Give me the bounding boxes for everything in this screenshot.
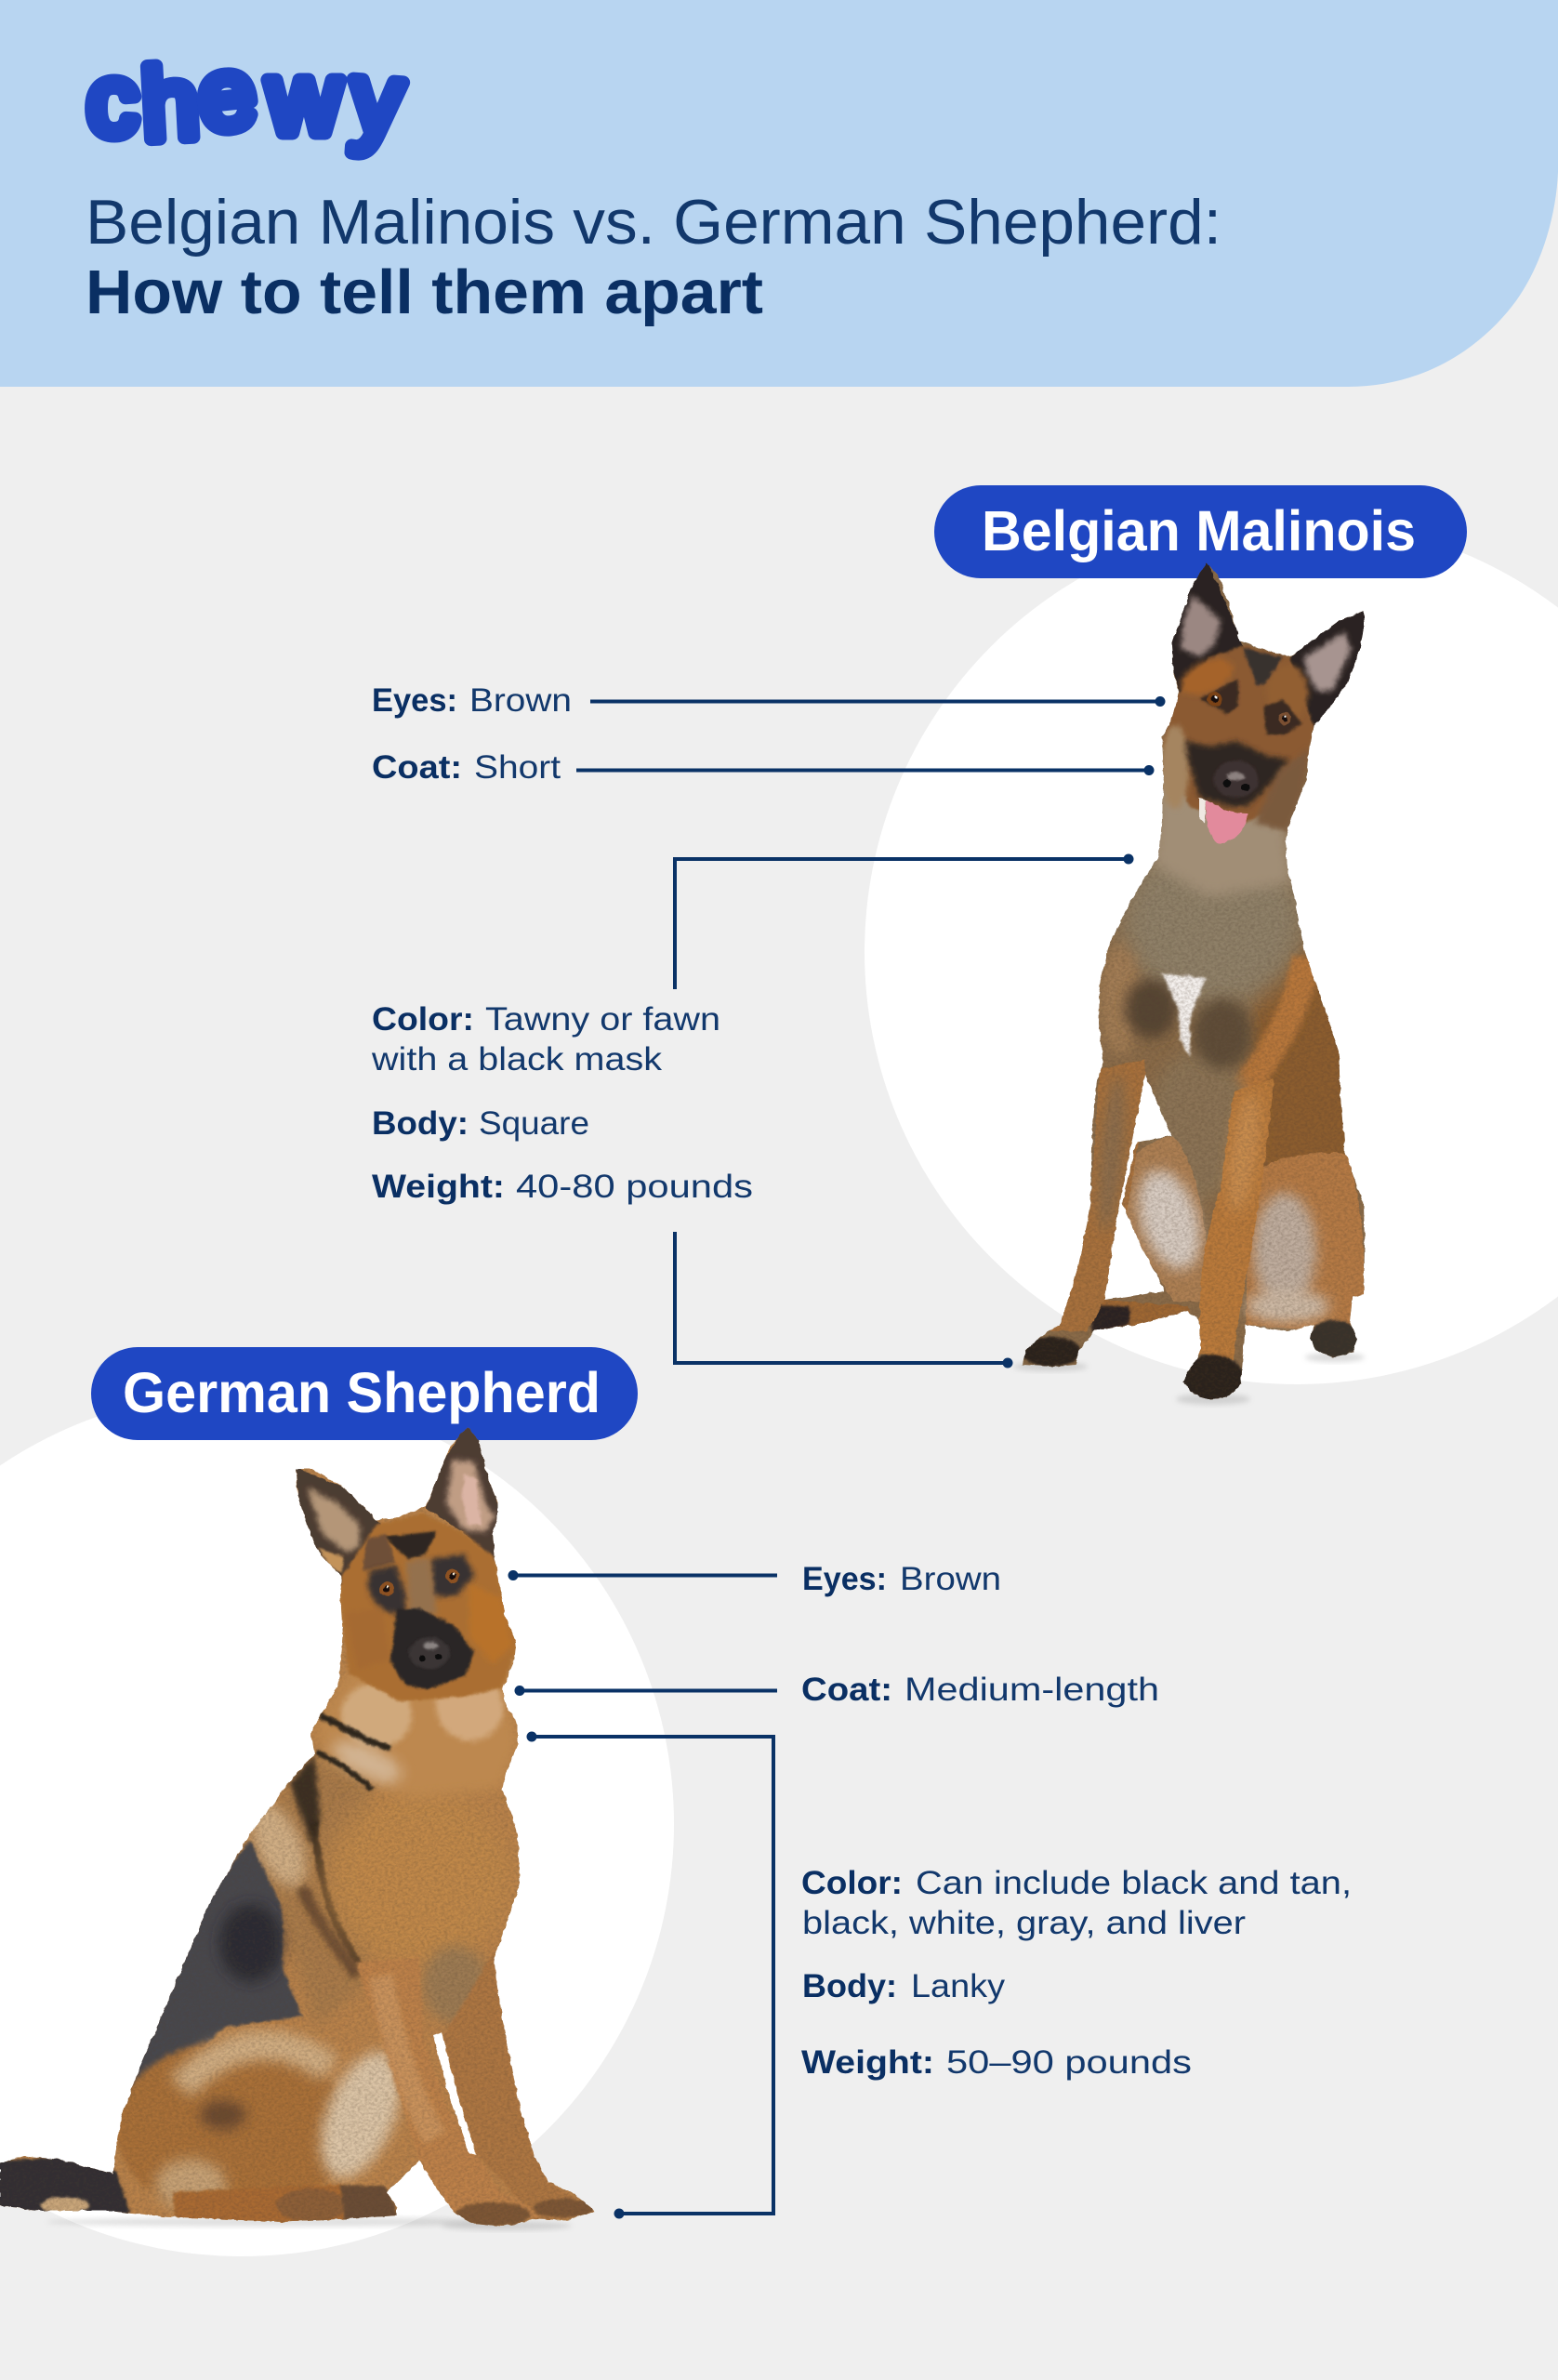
Shepherd text: body: Lanky	[911, 1968, 1006, 2004]
leader: Eyes	[508, 1570, 777, 1580]
Malinois text: body: Body:	[372, 1105, 469, 1142]
leader: bracket	[526, 1731, 773, 2218]
head	[1162, 645, 1314, 823]
Shepherd text: coat	[801, 1672, 1159, 1708]
neck	[1153, 776, 1301, 897]
Malinois text: eyes	[372, 682, 572, 719]
black saddle	[116, 1840, 302, 2129]
Shepherd text: color: black, white, gray, and liver	[802, 1905, 1246, 1941]
Shepherd text: eyes: Brown	[900, 1561, 1001, 1597]
Malinois text: color	[371, 1001, 720, 1078]
Malinois text: color: with a black mask	[371, 1041, 663, 1078]
nose and tongue	[1214, 760, 1259, 798]
Malinois text: body	[372, 1105, 589, 1142]
German Shepherd name pill	[91, 1347, 638, 1440]
Belgian Malinois name pill	[934, 485, 1467, 578]
Belgian Malinois name pill: Belgian Malinois	[982, 499, 1416, 562]
left front leg	[1050, 1060, 1145, 1331]
Malinois text: coat: Short	[474, 749, 561, 786]
head	[340, 1514, 517, 1701]
eyes	[1208, 692, 1222, 707]
Malinois text: eyes: Eyes:	[372, 682, 457, 719]
Malinois text: weight: Weight:	[372, 1169, 505, 1205]
Malinois text: eyes: Brown	[469, 682, 572, 719]
Malinois text: weight	[372, 1169, 753, 1205]
Shepherd text: weight	[801, 2044, 1192, 2081]
German Shepherd name pill: German Shepherd	[123, 1361, 601, 1424]
Shepherd text: weight: 50–90 pounds	[946, 2044, 1192, 2081]
Shepherd text: color	[801, 1865, 1352, 1941]
title	[86, 187, 1221, 327]
Shepherd text: body: Body:	[802, 1968, 897, 2004]
tail	[0, 2157, 130, 2216]
title: Belgian Malinois vs. German Shepherd:	[86, 187, 1221, 258]
back tan	[242, 1748, 372, 2027]
eyes	[379, 1582, 394, 1595]
Malinois text: coat	[372, 749, 561, 786]
leader: Coat	[576, 765, 1155, 775]
leader: upper bracket	[675, 853, 1134, 989]
centre front leg	[1197, 1078, 1274, 1359]
Malinois text: color: Tawny or fawn	[485, 1001, 720, 1038]
nose	[409, 1637, 450, 1669]
hind strip and paws	[1094, 1300, 1190, 1332]
ears	[296, 1467, 381, 1585]
Shepherd text: color: Can include black and tan,	[916, 1865, 1352, 1901]
Shepherd text: coat: Coat:	[801, 1672, 892, 1708]
Shepherd text: body	[802, 1968, 1006, 2004]
Malinois text: body: Square	[479, 1105, 589, 1142]
Malinois text: coat: Coat:	[372, 749, 462, 786]
Shepherd text: weight: Weight:	[801, 2044, 934, 2081]
leader: Coat	[515, 1686, 777, 1696]
hind thighs	[1120, 1136, 1208, 1302]
leader: Eyes	[590, 696, 1166, 707]
Malinois text: weight: 40-80 pounds	[516, 1169, 753, 1205]
ears	[1171, 563, 1244, 694]
shoulder stripe	[310, 1822, 363, 1965]
panel: German Shepherd	[0, 1347, 1352, 2256]
title: How to tell them apart	[86, 258, 763, 327]
Shepherd text: color: Color:	[801, 1865, 903, 1901]
Shepherd text: eyes	[802, 1561, 1001, 1597]
leader: lower bracket	[675, 1232, 1013, 1368]
rear foot	[172, 2185, 346, 2224]
German Shepherd photo illustration	[0, 1418, 604, 2236]
logo: chewy: chewy	[87, 34, 406, 161]
Belgian Malinois photo illustration	[1013, 553, 1376, 1408]
header banner	[0, 0, 1558, 387]
Shepherd text: eyes: Eyes:	[802, 1561, 887, 1597]
neck ruff	[314, 1664, 519, 1799]
front legs	[443, 1952, 595, 2224]
panel: Belgian Malinois	[371, 485, 1558, 1408]
chest	[325, 1790, 511, 1966]
Malinois text: color: Color:	[372, 1001, 474, 1038]
Shepherd text: coat: Medium-length	[904, 1672, 1159, 1708]
haunch	[116, 2040, 335, 2198]
